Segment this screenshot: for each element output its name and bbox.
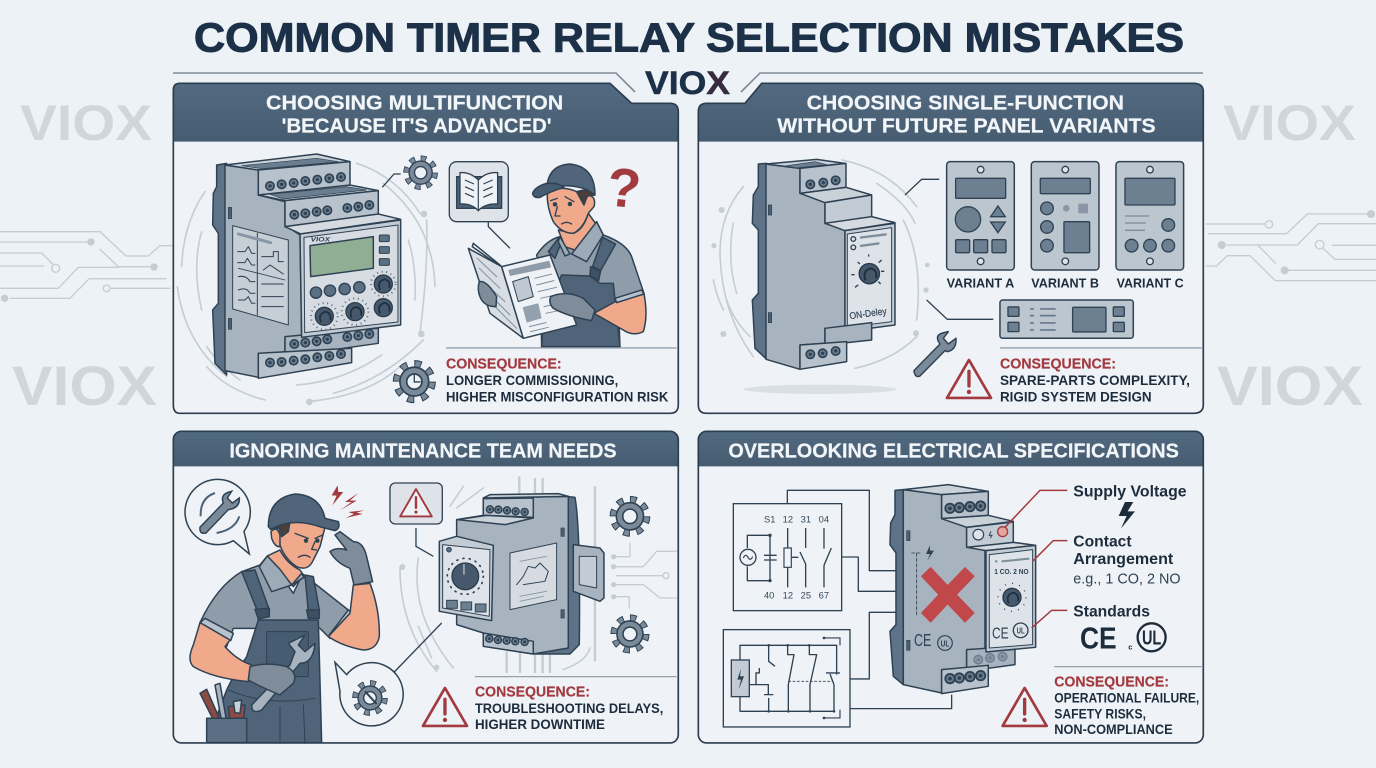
watermark: VIOX top right: VIOX	[1223, 95, 1356, 151]
label: contact arrangement: e.g., 1 CO, 2 NO	[1073, 571, 1181, 587]
heading	[266, 92, 563, 138]
icon: question mark: ?	[604, 155, 644, 220]
schematic: contact diagram: 67	[819, 590, 829, 600]
icon: wrench	[914, 332, 956, 377]
icon: manual	[449, 162, 510, 248]
watermark: VIOX bottom left: VIOX	[12, 354, 157, 417]
schematic: contact diagram: 12	[783, 590, 793, 600]
relay terminals	[805, 175, 841, 359]
watermark: VIOX top left: VIOX	[20, 95, 152, 151]
label: standards: c	[1128, 642, 1132, 651]
wiring	[787, 490, 952, 709]
variant C panel	[1116, 162, 1184, 290]
title rule with notch	[173, 73, 1203, 92]
relay details: CE	[914, 630, 931, 650]
relay dial and label	[849, 234, 888, 322]
heading: IGNORING MAINTENANCE TEAM NEEDS	[229, 440, 617, 462]
consequence block: CONSEQUENCE:	[446, 357, 562, 373]
worker reading manual	[468, 164, 646, 347]
panel: overlooking electrical specifications	[698, 431, 1203, 743]
circuit traces left	[0, 232, 172, 301]
consequence block: CONSEQUENCE:	[475, 684, 590, 700]
consequence block: TROUBLESHOOTING DELAYS,	[475, 700, 663, 716]
panel: choosing single-function	[698, 83, 1203, 413]
relay details: CE	[992, 626, 1009, 643]
logo: VIOX: VIOX	[645, 65, 731, 101]
schematic: contact diagram	[733, 504, 842, 611]
consequence block: NON-COMPLIANCE	[1054, 721, 1173, 737]
consequence block	[397, 348, 677, 404]
panel: choosing multifunction	[173, 83, 678, 413]
panel outline	[173, 431, 678, 743]
label: standards: UL	[1142, 628, 1161, 650]
label: contact arrangement: Arrangement	[1073, 551, 1173, 568]
motion arcs	[177, 163, 435, 405]
label: contact arrangement: Contact	[1073, 533, 1132, 550]
relay controls	[310, 235, 396, 330]
consequence block: CONSEQUENCE:	[1054, 674, 1169, 690]
motion arcs	[711, 160, 930, 394]
consequence block: HIGHER DOWNTIME	[475, 716, 605, 732]
heading: OVERLOOKING ELECTRICAL SPECIFICATIONS	[728, 440, 1179, 462]
schematic: contact diagram: 25	[801, 590, 811, 600]
heading	[777, 92, 1156, 138]
relay terminals	[265, 172, 374, 368]
consequence block: LONGER COMMISSIONING,	[446, 372, 618, 388]
horizontal variant module	[1000, 300, 1133, 338]
relay terminals and dial	[447, 505, 529, 646]
multifunction relay	[213, 154, 401, 378]
label: standards: Standards	[1073, 603, 1150, 620]
callout leaders	[1005, 490, 1067, 628]
label: supply voltage	[1073, 483, 1187, 529]
schematic: contact diagram: 12	[783, 514, 793, 524]
icon: gear with leader	[382, 158, 435, 187]
variant C panel: VARIANT C	[1117, 276, 1184, 290]
label: standards: CE	[1080, 622, 1117, 656]
schematic: contact diagram: 31	[801, 514, 811, 524]
variant B panel	[1031, 162, 1099, 290]
consequence block	[947, 348, 1202, 404]
consequence block: SAFETY RISKS,	[1054, 706, 1146, 722]
consequence block: HIGHER MISCONFIGURATION RISK	[446, 388, 668, 404]
schematic: contact diagram: 40	[764, 590, 774, 600]
relay dial and label: ON-Deley	[849, 306, 888, 322]
label: standards	[1073, 603, 1166, 656]
heading: CHOOSING SINGLE-FUNCTION	[807, 92, 1124, 114]
icon: stress lightning	[332, 485, 364, 518]
frustrated worker	[190, 494, 379, 743]
relay details: 1 CO. 2 NO	[994, 569, 1029, 576]
variant A panel	[947, 162, 1014, 290]
relay details	[914, 500, 1029, 684]
relay controls: VIOX	[311, 236, 331, 243]
callout: warning	[390, 483, 442, 556]
circuit background with rails	[399, 476, 677, 673]
variant A panel: VARIANT A	[947, 276, 1014, 290]
leader lines	[905, 179, 993, 319]
schematic: contact diagram: S1	[764, 514, 775, 524]
heading: WITHOUT FUTURE PANEL VARIANTS	[777, 116, 1156, 138]
consequence block	[423, 677, 677, 732]
variant B panel: VARIANT B	[1031, 276, 1099, 290]
schematic: control circuit	[723, 630, 850, 727]
consequence block	[1003, 667, 1202, 737]
label: supply voltage: Supply Voltage	[1073, 483, 1187, 500]
consequence block: RIGID SYSTEM DESIGN	[1000, 388, 1152, 404]
bubble: wrench service	[185, 479, 250, 554]
heading: 'BECAUSE IT'S ADVANCED'	[282, 116, 552, 138]
relay details: UL	[1017, 626, 1025, 636]
consequence block: OPERATIONAL FAILURE,	[1054, 689, 1199, 705]
heading: CHOOSING MULTIFUNCTION	[266, 92, 563, 114]
relay details: UL	[941, 638, 949, 648]
circuit traces right	[1206, 211, 1376, 281]
gears	[613, 500, 647, 650]
panel: ignoring maintenance team needs	[173, 431, 678, 743]
bubble: stripped gear	[335, 623, 442, 726]
relay with red cross	[890, 485, 1036, 694]
relay with large dial	[439, 494, 604, 654]
label: contact arrangement	[1073, 533, 1181, 587]
title: COMMON TIMER RELAY SELECTION MISTAKES	[194, 14, 1184, 60]
watermark: VIOX bottom right: VIOX	[1217, 354, 1363, 417]
schematic: contact diagram: 04	[819, 514, 829, 524]
icon: red cross	[921, 567, 974, 622]
consequence block: CONSEQUENCE:	[1000, 357, 1116, 373]
single-function relay	[752, 159, 895, 369]
consequence block: SPARE-PARTS COMPLEXITY,	[1000, 372, 1190, 388]
